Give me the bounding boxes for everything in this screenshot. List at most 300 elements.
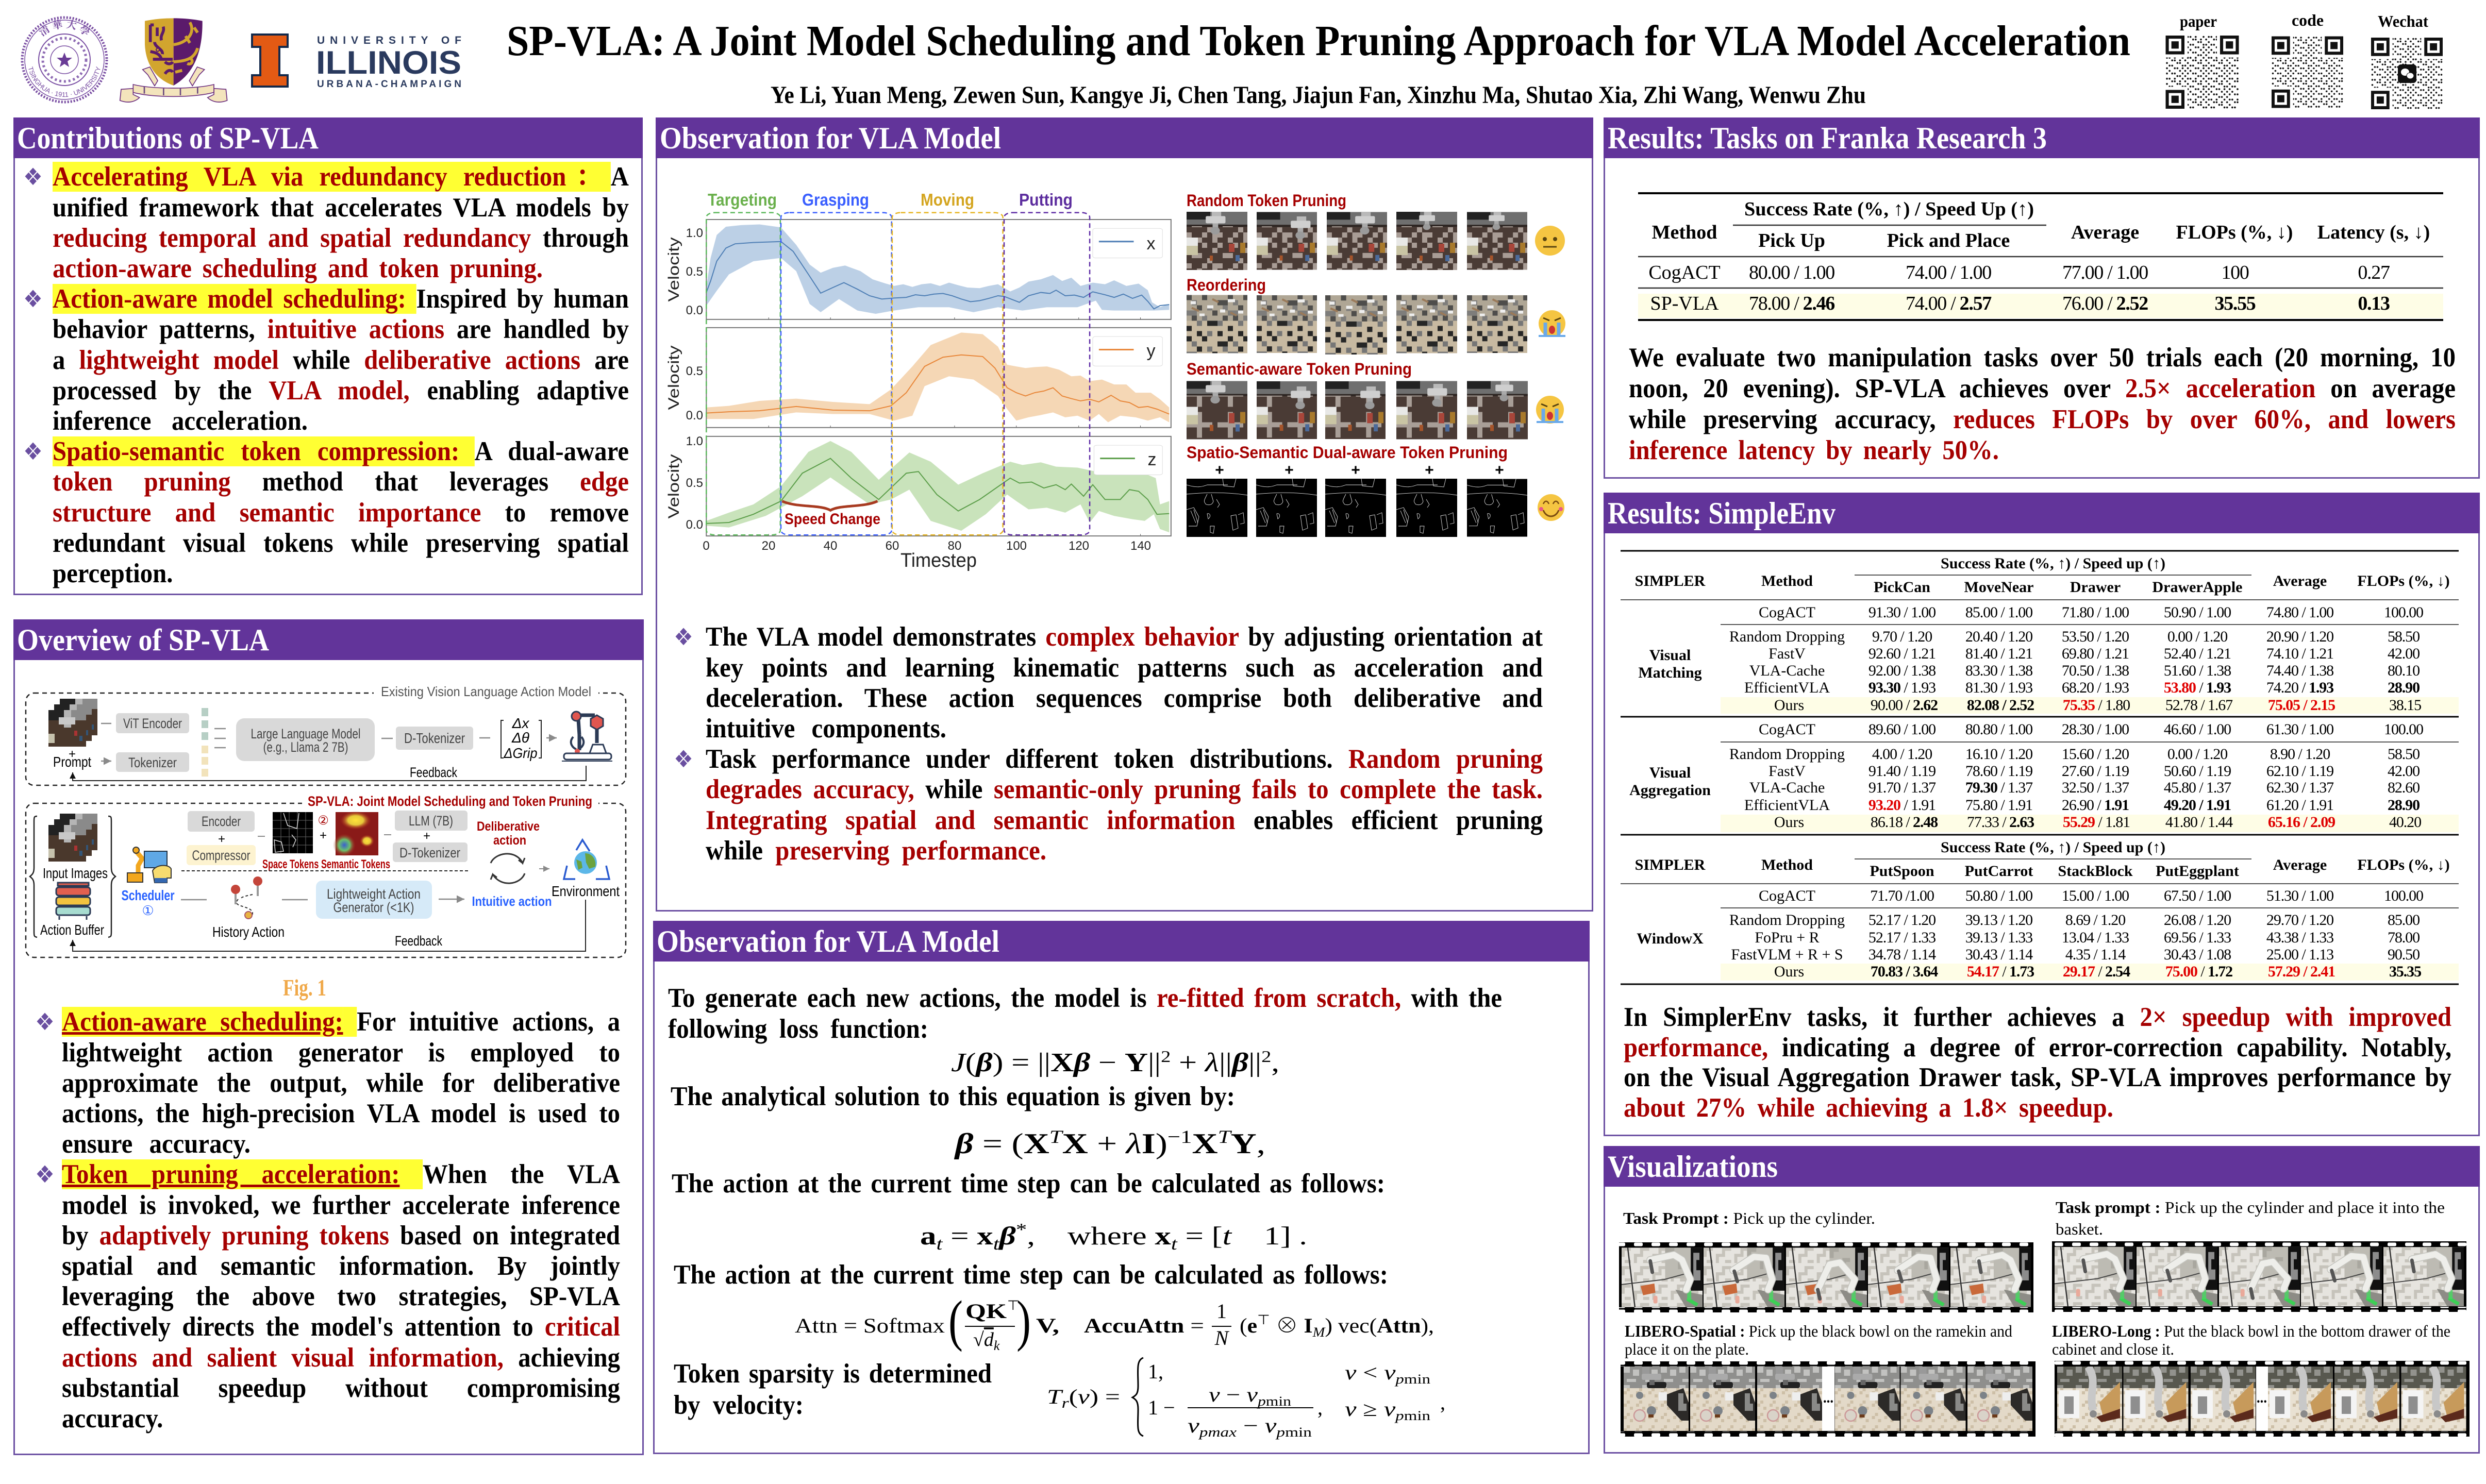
chart: velocity over timestep [665,190,1172,571]
table rows: Visual Matching: 85.00 / 1.00 [1965,604,2032,621]
table: Franka results: 74.00 / 1.00 [1906,262,1991,283]
table: Franka results: 100 [2221,262,2249,283]
box: existing VLA model: ViT Encoder [123,716,182,731]
equation: action at time t: t [1171,1235,1178,1254]
panel: Results SimpleEnv [1604,493,2480,1136]
table header: Visual groups: Method [1761,572,1813,589]
axis labels and ticks: 0.5 [686,476,703,490]
box: SP-VLA joint model [26,794,626,957]
equation: token sparsity piecewise: 1 − [1148,1396,1175,1419]
equation: loss function: J(β) = || Xβ − Y|| [951,1048,1159,1077]
text block: overview details: approximate the output, while for deliberative [62,1068,620,1098]
table rows: Visual Matching: 52.40 / 1.21 [2164,645,2231,662]
equation: analytical solution: T [1218,1126,1232,1147]
diagram: Fig. 1 architecture [25,684,627,1001]
row: random token pruning: Random Token Pruning [1187,191,1346,210]
box: existing VLA model [26,684,626,785]
logo: Tsinghua University seal: TSINGHUA · 1911 · UNIVERSITY [28,66,100,97]
row: semantic-aware token pruning [1187,360,1528,439]
table rows: Visual Aggregation: Random Dropping [1729,746,1845,763]
box: SP-VLA joint model: Deliberative [477,819,540,834]
image: semantic tokens heat map [333,811,378,856]
table rows: WindowX: 70.83 / 3.64 [1871,963,1938,980]
axis labels and ticks: 120 [1069,539,1089,553]
table rows: Visual Matching: 83.30 / 1.38 [1965,662,2032,679]
text: model refit intro [668,983,1502,1044]
table rows: WindowX: 34.78 / 1.14 [1868,946,1936,963]
table: Franka results: 80.00 / 1.00 [1749,262,1834,283]
equation: action at time t: = [ [1177,1221,1223,1250]
table header: Visual groups: DrawerApple [2153,579,2242,596]
row: spatio-semantic dual-aware token pruning: + [1425,462,1434,479]
table rows: Visual Matching: Ours [1774,697,1804,714]
equation: attention [795,1289,1434,1353]
text block: contributions list: processed by the VLA model, enabling adaptive [53,376,629,406]
equation: attention: ) [1016,1289,1031,1352]
text block: contributions list: a lightweight model while deliberative actions are [53,345,629,375]
film strips and task prompts [1604,1192,2480,1450]
text block: contributions list: structure and semantic importance to remove [53,498,629,528]
table header: Visual groups: Method [1761,856,1813,873]
icon: environment globe [564,840,609,879]
panel: Observation for VLA Model (equations) [653,921,1590,1454]
table rows: Visual Aggregation: 75.80 / 1.91 [1965,797,2032,814]
table rows: Visual Aggregation: 4.00 / 1.20 [1872,746,1932,763]
text block: overview details: ensure accuracy. [62,1129,251,1159]
text block: SimpleEnv summary: In SimplerEnv tasks, it further achieves a 2× speedup with improved [1624,1002,2451,1032]
table rows: Visual Aggregation: 32.50 / 1.37 [2062,779,2129,796]
image: space tokens [273,812,313,853]
equation: token sparsity piecewise: v) = [1078,1385,1113,1408]
box: SP-VLA joint model: D-Tokenizer [399,845,460,861]
text block: contributions list: perception. [53,559,173,588]
equation: token sparsity piecewise: pmin [1258,1394,1287,1409]
table rows: Visual Aggregation: 28.90 [2388,797,2420,814]
table rows: Visual Aggregation: 8.90 / 1.20 [2270,746,2330,763]
text block: Franka summary: noon, 20 evening). SP-VLA achieves over 2.5× acceleration on average [1629,374,2456,403]
table header: Visual groups: FLOPs (%, ↓) [2357,572,2450,589]
text block: Franka summary: while preserving accuracy, reduces FLOPs by over 60%, and lowers [1629,404,2456,434]
equation: loss function: λ||β|| [1205,1048,1259,1077]
caption: Fig. 1: Fig. 1 [283,974,326,1001]
equation: token sparsity piecewise [1047,1358,1445,1440]
QR code: code: code [2292,11,2324,29]
equation: analytical solution: X [1062,1128,1088,1160]
table rows: Visual Aggregation: 40.20 [2389,814,2421,831]
table header: Visual groups: Success Rate (%, ↑) / Speed up (↑) [1941,839,2165,856]
table rows: Visual Aggregation: 82.60 [2388,779,2420,796]
table rows: WindowX: 52.17 / 1.20 [1868,912,1936,929]
axis labels and ticks: 0.5 [686,265,703,279]
panel: Observation for VLA Model (charts): ❖ [674,623,693,651]
table rows: Visual Matching: 0.00 / 1.20 [2167,628,2227,645]
table rows: Visual Aggregation: 55.29 / 1.81 [2063,814,2130,831]
text block: overview details: Token pruning acceleration: When the VLA [62,1159,620,1189]
panel: Overview of SP-VLA: ❖ [35,1008,55,1036]
logo: University of Illinois wordmark [316,35,461,90]
logo: University of Illinois wordmark: URBANA-CHAMPAIGN [317,79,461,90]
table rows: Visual Matching: FastV [1768,645,1806,662]
phase labels [708,190,1073,209]
table rows: Visual Aggregation: 62.30 / 1.37 [2266,779,2334,796]
table rows: Visual Aggregation: 62.10 / 1.19 [2266,763,2333,780]
table: Franka results: 0.27 [2358,262,2390,283]
speed change brace [782,501,877,510]
table rows: Visual Matching: 53.80 / 1.93 [2164,679,2231,696]
equation: loss function: 2 [1261,1047,1271,1066]
table rows: Visual Matching: 42.00 [2388,645,2420,662]
text block: overview details: effectively directs the model's attention to critical [62,1312,620,1342]
axis labels and ticks: 0.0 [686,303,703,317]
equation: attention: ⊗ [1270,1314,1304,1337]
table rows: Visual Matching: 74.20 / 1.93 [2266,679,2333,696]
icon: smiling face [1538,494,1564,521]
table: Franka results: Pick and Place [1887,230,2010,251]
equation: action at time t: x [977,1221,993,1250]
table header: Visual groups: SIMPLER [1635,856,1706,873]
text block: observation bullets: key points and learning kinematic patterns such as acceleration and [706,653,1543,683]
text block: observation bullets: while preserving performance. [706,836,1046,866]
prompt: LIBERO-Spatial: LIBERO-Spatial : Pick up the black bowl on the ramekin and [1625,1322,2012,1340]
text block: SimpleEnv summary [1624,1002,2451,1123]
equation: token sparsity piecewise: v [1265,1414,1277,1437]
text block: overview details: model is invoked, we further accelerate inference [62,1190,620,1220]
text block: contributions list: reducing temporal and spatial redundancy through [53,223,629,253]
table rows: Visual Aggregation: 61.30 / 1.00 [2266,721,2333,738]
equation: action at time t: β [998,1221,1016,1250]
equation: token sparsity piecewise: v < v [1345,1361,1393,1384]
prompt: LIBERO-Spatial [1625,1322,2012,1358]
panel: Observation for VLA Model (charts): ❖ [674,745,693,773]
equation: token sparsity piecewise: v − v [1209,1383,1256,1406]
equation: token sparsity piecewise: pmin [1276,1425,1306,1440]
table rows: WindowX: 67.50 / 1.00 [2164,887,2231,904]
equation: action at time t: = [942,1221,977,1250]
table rows: WindowX: Random Dropping [1729,912,1845,929]
text: token sparsity: Token sparsity is determined [674,1359,992,1389]
table header: Visual groups: SIMPLER [1635,572,1706,589]
axis labels and ticks: 80 [948,539,961,553]
prompt: pick up the cylinder: Task Prompt : Pick up the cylinder. [1623,1209,1875,1227]
row: spatio-semantic dual-aware token pruning: + [1215,462,1224,479]
equation: analytical solution: −1 [1167,1126,1192,1147]
authors: Ye Li, Yuan Meng, Zewen Sun, Kangye Ji, Chen Tang, Jiajun Fan, Xinzhu Ma, Shutao Xia, Zhi Wang, Wenwu Zhu [771,81,1866,109]
table rows: Visual Matching: 53.50 / 1.20 [2062,628,2129,645]
box: SP-VLA joint model: LLM (7B) [409,813,453,829]
axis labels and ticks: 0.5 [686,364,703,378]
equation: attention: ) vec( [1325,1314,1377,1337]
box: existing VLA model: Tokenizer [128,755,177,770]
table rows: WindowX: 8.69 / 1.20 [2065,912,2125,929]
table rows: Visual Matching: 75.35 / 1.80 [2063,697,2130,714]
panel: Contributions of SP-VLA: ❖ [23,285,43,313]
heading: Results SimpleEnv [1604,493,2480,533]
equation: attention: ( [948,1289,963,1352]
equation: token sparsity piecewise: 1, [1148,1360,1163,1383]
table header: Visual groups: StackBlock [2058,863,2133,880]
icon: scheduler robot and person [127,847,171,883]
icon: robot arm [562,712,612,761]
equation: token sparsity piecewise: v ≥ v [1345,1397,1393,1421]
table header: Visual groups: Matching [1638,664,1702,681]
phase labels: Grasping [802,190,869,209]
text block: Franka summary: We evaluate two manipulation tasks over 50 trials each (20 morning, 10 [1629,343,2456,373]
text block: contributions list: inference acceleration. [53,406,308,436]
film strip: LIBERO-Spatial [1621,1361,2035,1437]
equation: analytical solution: + λI) [1095,1128,1165,1160]
panel: Contributions of SP-VLA: ❖ [23,163,43,191]
table: Franka results: 76.00 / 2.52 [2062,293,2148,314]
text block: Franka summary [1629,343,2456,466]
axis labels and ticks: 1.0 [686,226,703,240]
table rows: Visual Matching: 100.00 [2384,604,2423,621]
table rows: Visual Aggregation: FastV [1768,763,1806,780]
table header: Visual groups: Aggregation [1629,782,1711,799]
equation: attention: k [994,1338,1000,1353]
box: existing VLA model: D-Tokenizer [404,730,465,746]
box: SP-VLA joint model: + [320,829,327,842]
heading: Observation: Observation for VLA Model [657,924,999,958]
text block: contributions list: redundant visual tokens while preserving spatial [53,528,629,558]
table rows: WindowX: 100.00 [2384,887,2423,904]
table rows: WindowX: 85.00 [2388,912,2420,929]
table rows: Visual Aggregation: 15.60 / 1.20 [2062,746,2129,763]
table: Franka results [1604,184,2480,349]
axis labels and ticks [665,226,1157,571]
phase labels: Putting [1019,190,1073,209]
heading: Visualizations [1604,1146,2480,1187]
table rows: WindowX: CogACT [1759,887,1815,904]
table rows: WindowX: 71.70 /1.00 [1870,887,1934,904]
text block: contributions list: token pruning method that leverages edge [53,467,629,497]
logo: University of Illinois wordmark: UNIVERSITY OF [317,35,461,46]
table rows: Visual Aggregation: 49.20 / 1.91 [2164,797,2231,814]
panel: Contributions of SP-VLA [13,117,643,595]
table header: Visual groups: Drawer [2070,579,2121,596]
heading: Observation [656,117,1593,158]
table rows: WindowX: 39.13 / 1.20 [1965,912,2032,929]
icon: history action path [231,876,262,919]
box: SP-VLA joint model: ① [142,903,154,919]
equation: token sparsity piecewise: ( [1069,1385,1078,1408]
equation: analytical solution: Y [1230,1128,1257,1160]
table rows: WindowX: 35.35 [2389,963,2421,980]
QR code: paper: paper [2180,12,2217,30]
table rows: Visual Aggregation: 65.16 / 2.09 [2268,814,2335,831]
box: existing VLA model: Prompt [53,754,91,770]
table rows: Visual Matching: 68.20 / 1.93 [2062,679,2129,696]
table rows: WindowX: Ours [1774,963,1804,980]
table rows: Visual Aggregation: 79.30 / 1.37 [1965,779,2032,796]
axis labels and ticks: 60 [886,539,899,553]
equation: token sparsity piecewise: pmax [1198,1425,1237,1440]
QR code: paper [2166,12,2239,109]
text block: contributions list: Accelerating VLA via redundancy reduction：A [53,162,629,192]
box: SP-VLA joint model: ② [318,813,329,828]
image grid: token pruning strategies [1187,191,1565,537]
table rows: Visual Aggregation: 80.80 / 1.00 [1965,721,2032,738]
table rows: Visual Matching: 50.90 / 1.00 [2164,604,2231,621]
table rows: Visual Aggregation: 91.40 / 1.19 [1868,763,1936,780]
box: SP-VLA joint model: Generator (<1K) [333,900,414,915]
axis labels and ticks: Velocity [665,454,682,519]
equation: analytical solution: T [1049,1126,1064,1147]
table rows: WindowX: FoPru + R [1755,929,1820,946]
table: Franka results: 35.55 [2214,293,2256,314]
equation: token sparsity piecewise: pmin [1396,1372,1425,1387]
box: SP-VLA joint model: + [423,829,430,843]
equation: attention: I [1304,1314,1313,1337]
heading: Contributions [13,117,643,158]
equation: loss function: + [1171,1048,1205,1077]
table rows: Visual Matching: 38.15 [2389,697,2421,714]
prompt: LIBERO-Long: cabinet and close it. [2052,1340,2174,1358]
table header: Visual groups: Visual [1649,764,1691,781]
prompt: pick and place into basket: basket. [2056,1220,2103,1238]
box: SP-VLA joint model: Lightweight Action [327,886,421,902]
table rows: Visual Matching: 74.80 / 1.00 [2266,604,2333,621]
text block: observation bullets: degrades accuracy, while semantic-only pruning fails to complete the task. [706,774,1543,804]
table rows: Visual Matching: 70.50 / 1.38 [2062,662,2129,679]
equation: attention: M [1312,1325,1326,1340]
text block: contributions list: Action-aware model scheduling: Inspired by human [53,284,629,314]
equation: attention: ⊤ [1257,1312,1270,1327]
table rows: Visual Matching: EfficientVLA [1744,679,1830,696]
equation: token sparsity piecewise: pmin [1395,1408,1425,1423]
heading: Visualizations: Visualizations [1608,1150,1778,1184]
table rows: Visual Aggregation: 50.60 / 1.19 [2164,763,2231,780]
icon: action buffer [56,883,90,920]
table rows: Visual Matching: 20.90 / 1.20 [2266,628,2333,645]
text: action calculation: The action at the current time step can be calculated as follows: [672,1169,1385,1199]
table: Franka results: Pick Up [1758,230,1825,251]
row: semantic-aware token pruning: Semantic-aware Token Pruning [1187,360,1412,378]
equation: attention: Attn = Softmax [795,1314,945,1337]
table rows: Visual Aggregation: 45.80 / 1.37 [2164,779,2231,796]
prompt: pick and place into basket: Task prompt : Pick up the cylinder and place it into the [2056,1198,2445,1217]
table rows: WindowX: 29.17 / 2.54 [2063,963,2130,980]
table: SimpleEnv results [1604,544,2480,992]
text block: contributions list: behavior patterns, intuitive actions are handled by [53,314,629,344]
axis labels and ticks: 20 [762,539,775,553]
text block: overview details: actions, the high-precision VLA model is used to [62,1099,620,1128]
box: existing VLA model: + [69,747,76,761]
panel: Overview of SP-VLA [13,619,644,1455]
axis labels and ticks: 140 [1130,539,1151,553]
table rows: WindowX [1729,887,2423,980]
axis labels and ticks: Velocity [665,237,682,302]
table rows: Visual Aggregation: 86.18 / 2.48 [1871,814,1938,831]
table rows: WindowX: 90.50 [2388,946,2420,963]
table: Franka results: Average [2071,222,2139,243]
film strip: LIBERO-Long [2055,1361,2470,1437]
text block: overview details [35,1007,620,1434]
text: token sparsity: by velocity: [674,1390,804,1420]
axis labels and ticks: 0 [703,539,710,553]
equation: attention: QK [965,1300,1007,1323]
text: model refit intro: To generate each new actions, the model is re-fitted from scratch, with the [668,983,1502,1013]
QR code: code [2272,11,2343,108]
text block: SimpleEnv summary: on the Visual Aggregation Drawer task, SP-VLA improves performance by [1624,1063,2451,1092]
prompt: LIBERO-Long [2052,1322,2450,1358]
table rows: Visual Matching: 92.00 / 1.38 [1868,662,1936,679]
table rows: Visual Matching: 81.30 / 1.93 [1965,679,2032,696]
table rows: Visual Aggregation: EfficientVLA [1744,797,1830,814]
table rows: Visual Matching: VLA-Cache [1749,662,1825,679]
table: Franka results: CogACT [1648,262,1721,283]
text block: overview details: actions and salient visual information, achieving [62,1343,620,1373]
logo: Illinois block I [252,35,288,87]
table rows: Visual Matching: 75.05 / 2.15 [2268,697,2335,714]
table header: Visual groups: Average [2273,856,2327,873]
equation: loss function: 2 [1161,1047,1171,1066]
text block: overview details: substantial speedup without compromising [62,1373,620,1403]
logo: University of Illinois wordmark: ILLINOIS [316,45,461,81]
logo: Tsinghua University seal [21,16,108,103]
box: SP-VLA joint model: Encoder [202,814,241,829]
equation: token sparsity piecewise: v [1188,1414,1199,1437]
icon: crying face [1539,310,1565,337]
logo: CUHK shield [120,18,227,102]
box: SP-VLA joint model: Intuitive action [472,893,552,909]
prompt: pick and place into basket [2056,1198,2445,1238]
series: y velocity [706,328,1171,428]
equation: attention: ⊤ [1007,1298,1019,1313]
table rows: WindowX: 78.00 [2388,929,2420,946]
table header: Visual groups: FLOPs (%, ↓) [2357,856,2450,873]
box: SP-VLA joint model: Compressor [192,848,251,863]
table header: Visual groups: Visual [1649,647,1691,664]
axis labels and ticks: x [1146,234,1156,254]
table rows: Visual Matching: 28.90 [2388,679,2420,696]
panel: Contributions of SP-VLA: ❖ [23,437,43,465]
table rows: WindowX: 54.17 / 1.73 [1967,963,2034,980]
row: spatio-semantic dual-aware token pruning [1187,443,1527,537]
box: SP-VLA joint model: Space Tokens Semantic Tokens [262,857,390,871]
text block: SimpleEnv summary: performance, indicating a degree of error-correction capability. Notably, [1624,1033,2451,1063]
equation: action at time t: t [936,1235,943,1254]
text block: observation bullets [674,622,1543,866]
table: Franka results: 78.00 / 2.46 [1749,293,1834,314]
equation: attention: (e [1240,1314,1256,1337]
icon: cycle arrows [491,854,525,883]
table header: Visual groups: Success Rate (%, ↑) / Speed up (↑) [1941,555,2165,572]
table rows: Visual Aggregation: 61.20 / 1.91 [2266,797,2333,814]
text block: contributions list: Spatio-semantic token compression: A dual-aware [53,436,629,466]
box: existing VLA model: Δx [512,715,529,731]
table rows: WindowX: 57.29 / 2.41 [2268,963,2335,980]
panel: Results Franka Research 3 [1604,117,2480,479]
equation: action at time t: t 1] . [1223,1221,1292,1250]
title: SP-VLA: A Joint Model Scheduling and Token Pruning Approach for VLA Model Acceleration [507,17,2130,65]
table rows: Visual Matching: 80.10 [2388,662,2420,679]
equation: token sparsity piecewise: − [1237,1414,1265,1437]
table rows: Visual Aggregation: 77.33 / 2.63 [1967,814,2034,831]
text: token sparsity [674,1358,992,1421]
QR code: Wechat: Wechat [2378,12,2428,30]
equation: action at time t: x [1155,1221,1171,1250]
film strip: LIBERO-Spatial: ... [1823,1389,1833,1406]
table rows: WindowX: 15.00 / 1.00 [2062,887,2129,904]
equation: analytical solution: , [1257,1128,1264,1160]
logo: Tsinghua University seal: 清 華 大 學 [38,20,90,36]
table rows: Visual Aggregation: 0.00 / 1.20 [2167,746,2227,763]
box: SP-VLA joint model: History Action [212,924,285,940]
text block: contributions list [23,162,629,588]
equation: action at time t: t [993,1235,1000,1254]
table rows: Visual Aggregation: CogACT [1759,721,1815,738]
table: Franka results: 77.00 / 1.00 [2062,262,2148,283]
